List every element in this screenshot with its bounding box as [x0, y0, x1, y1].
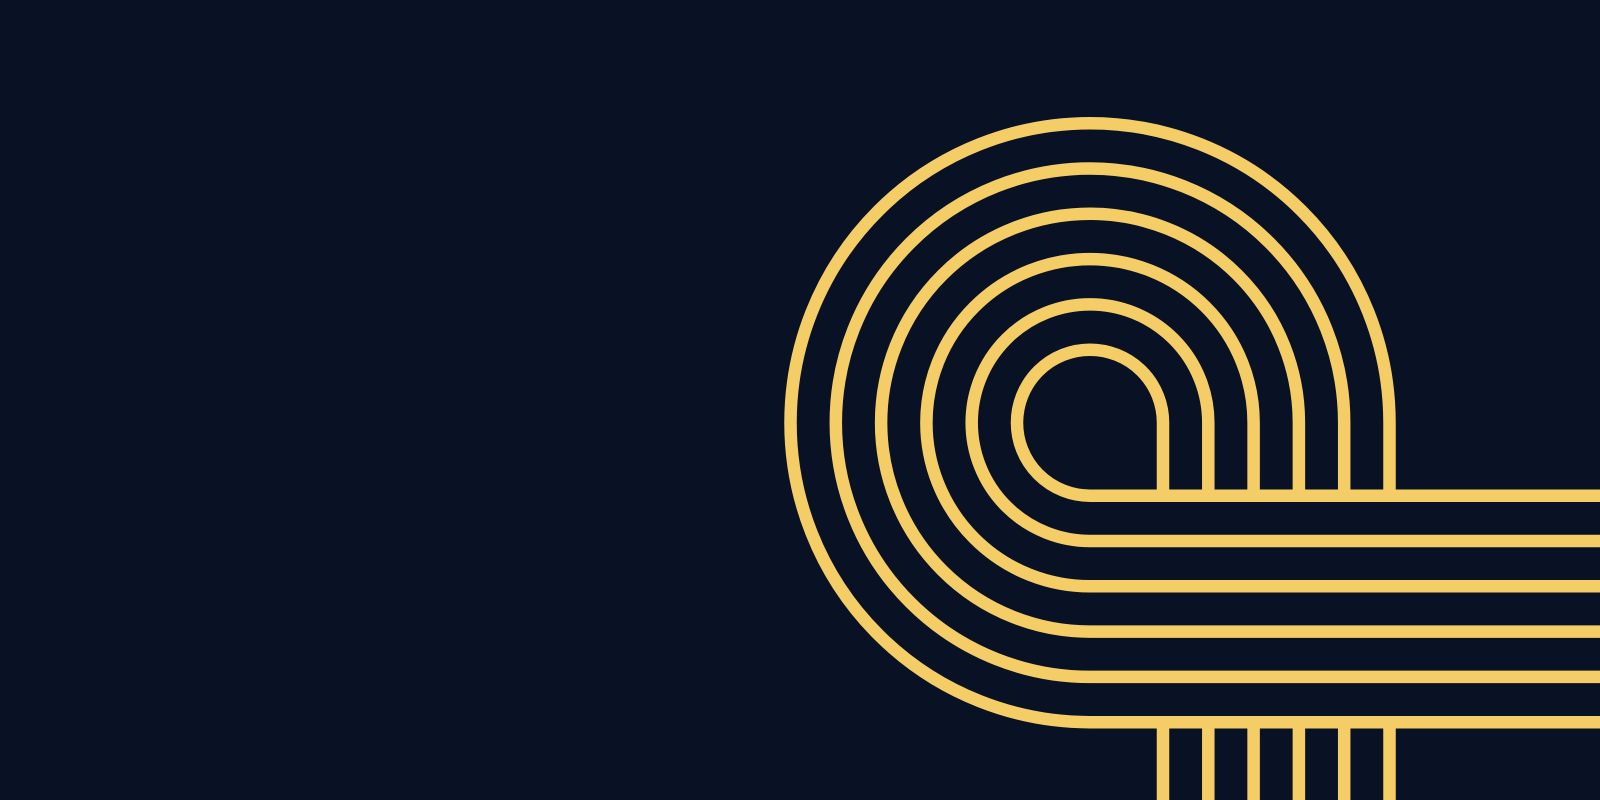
lower vertical stems: [1163, 722, 1390, 800]
loop 1 (innermost): [1017, 350, 1600, 496]
loop 2: [972, 304, 1600, 541]
loop 5: [836, 169, 1600, 677]
loop 4: [881, 214, 1600, 632]
loop 6 (outermost): [790, 123, 1600, 722]
concentric gold line pattern: [790, 123, 1600, 800]
loop 3: [926, 259, 1600, 586]
